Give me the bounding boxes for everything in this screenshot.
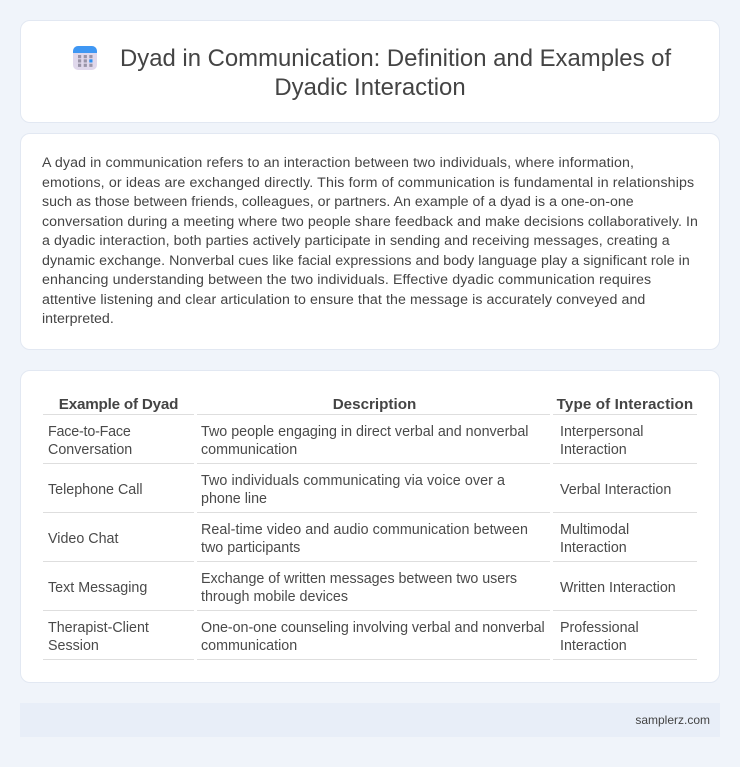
row: telephone call: Telephone Call [48, 482, 143, 498]
header: description: Description [333, 396, 416, 413]
row: face-to-face: Face-to-Face [48, 424, 131, 440]
row: video chat: Multimodal [560, 522, 629, 538]
row: text messaging: Written Interaction [560, 580, 676, 596]
row: video chat [48, 522, 629, 556]
text block: definition: enhancing understanding between the two individuals. Effective dyadic communication requires [42, 272, 651, 288]
text block: definition: interpreted. [42, 311, 114, 327]
header: type of interaction: Type of Interaction [557, 396, 693, 413]
row: video chat: Interaction [560, 540, 627, 556]
row: text messaging [48, 571, 676, 605]
row: video chat: Real-time video and audio communication between [201, 522, 528, 538]
row: therapist-client: One-on-one counseling involving verbal and nonverbal [201, 620, 545, 636]
title: Dyad in Communication: Definition and Examples of [120, 45, 671, 72]
row: telephone call: phone line [201, 491, 267, 507]
row: text messaging: Exchange of written messages between two users [201, 571, 517, 587]
row: telephone call: Two individuals communicating via voice over a [201, 473, 505, 489]
row: face-to-face: Interaction [560, 442, 627, 458]
row: text messaging: Text Messaging [48, 580, 147, 596]
table: dyad examples [43, 396, 697, 660]
row: video chat: two participants [201, 540, 300, 556]
row: face-to-face: Interpersonal [560, 424, 643, 440]
header: example of dyad: Example of Dyad [59, 396, 178, 413]
row: therapist-client [48, 620, 639, 654]
text block: definition: attentive listening and clear articulation to ensure that the message is accurately conveyed and [42, 292, 645, 308]
footer text: samplerz.com [635, 713, 710, 727]
title: Dyadic Interaction [274, 74, 466, 101]
row: therapist-client: communication [201, 638, 297, 654]
text block: definition: A dyad in communication refers to an interaction between two individuals, where information, [42, 155, 634, 171]
text block: definition: a dyadic interaction, both parties actively participate in sending and receiving messages, creating a [42, 233, 670, 249]
row: face-to-face: Conversation [48, 442, 132, 458]
text block: definition: dynamic exchange. Nonverbal cues like facial expressions and body language play a significant role in [42, 252, 690, 268]
panel: definition card [20, 133, 720, 350]
row: therapist-client: Therapist-Client [48, 620, 149, 636]
panel: title card [20, 20, 720, 123]
row: therapist-client: Professional [560, 620, 639, 636]
text block: definition [42, 155, 698, 327]
text block: definition: conversation during a meeting where two people share feedback and make decisions collaboratively. In [42, 214, 698, 230]
row: video chat: Video Chat [48, 531, 118, 547]
row: text messaging: through mobile devices [201, 589, 348, 605]
row: face-to-face: Two people engaging in direct verbal and nonverbal [201, 424, 528, 440]
row: face-to-face: communication [201, 442, 297, 458]
text block: definition: emotions, or ideas are exchanged directly. This form of communication is fundamental in relationships [42, 174, 694, 190]
row: therapist-client: Session [48, 638, 99, 654]
icon: calendar [73, 46, 97, 70]
panel: table card [20, 370, 720, 683]
row: telephone call: Verbal Interaction [560, 482, 671, 498]
row: telephone call [48, 473, 671, 507]
title [120, 45, 672, 101]
row: therapist-client: Interaction [560, 638, 627, 654]
text block: definition: such as those between friends, colleagues, or partners. An example of a dyad is a one-on-one [42, 194, 634, 210]
row: face-to-face [48, 424, 643, 458]
footer bar [20, 703, 720, 737]
